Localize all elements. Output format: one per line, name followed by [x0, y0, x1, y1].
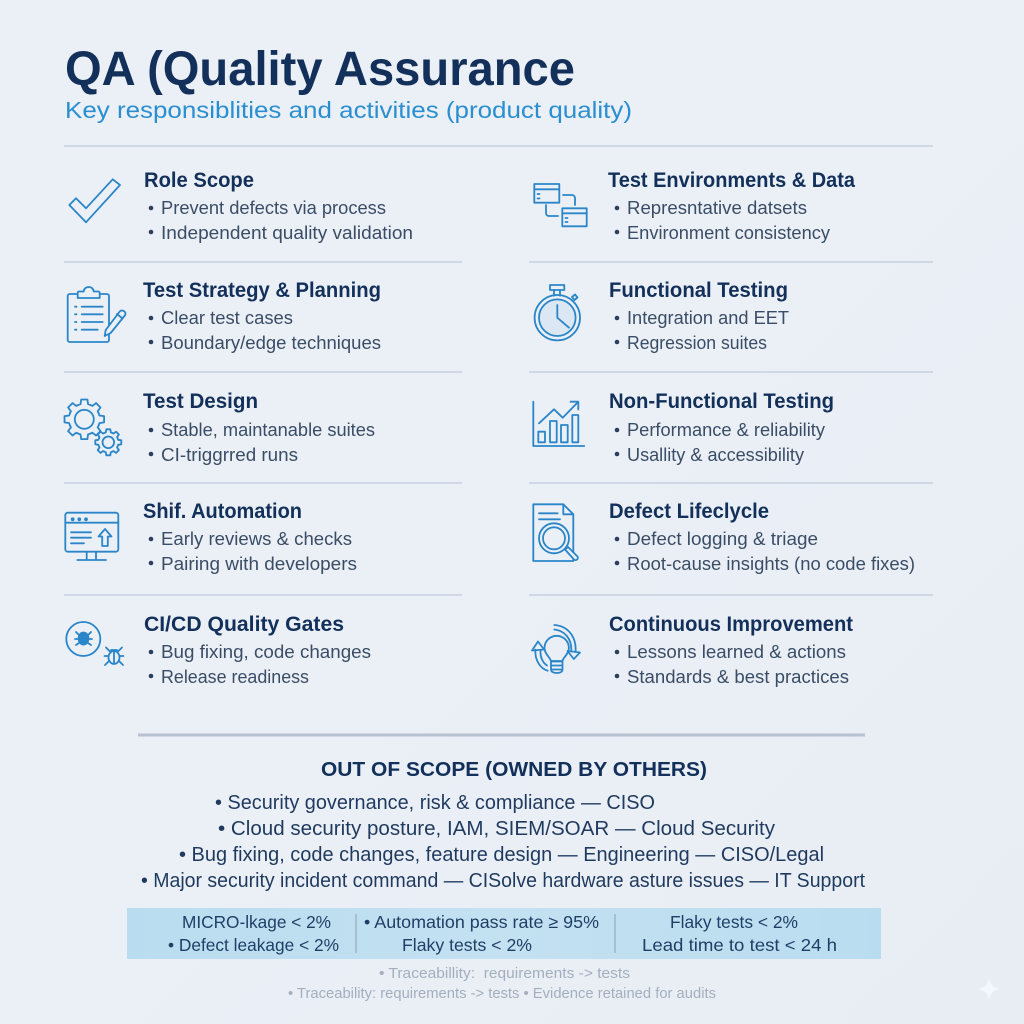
panel: defect lifecycle	[533, 500, 915, 574]
panel: test design	[64, 390, 375, 465]
metrics column 2	[364, 912, 599, 955]
bullets: defect lifecycle: Root-cause insights (no code fixes)	[627, 554, 915, 574]
footnotes: • Traceability: requirements -> tests • Evidence retained for audits	[288, 986, 716, 1002]
icon: linked windows	[534, 184, 587, 226]
heading: out of scope: OUT OF SCOPE (OWNED BY OTHERS)	[321, 759, 707, 781]
metrics column 3: Flaky tests < 2%	[670, 912, 798, 932]
icon: monitor with upload arrow	[65, 513, 118, 560]
out of scope list: • Major security incident command — CISolve hardware asture issues — IT Support	[141, 870, 865, 892]
bullets: functional testing: Integration and EET	[627, 308, 789, 328]
panel: shift automation	[65, 500, 357, 574]
heading: test strategy: Test Strategy & Planning	[143, 279, 381, 302]
bullets: test design	[149, 420, 375, 465]
panel: functional testing	[535, 279, 789, 353]
bullets: functional testing: Regression suites	[627, 333, 767, 353]
bullets: test strategy: Clear test cases	[161, 308, 293, 328]
bullets: continuous improvement: Lessons learned & actions	[627, 642, 846, 662]
panel: non-functional testing	[533, 390, 834, 465]
heading: CI/CD quality gates: CI/CD Quality Gates	[144, 613, 344, 636]
bullets: test design: Stable, maintanable suites	[161, 420, 375, 440]
metrics column 2: Flaky tests < 2%	[402, 935, 532, 955]
icon: light bulb with cycle arrows	[532, 625, 580, 673]
metrics column 3: Lead time to test < 24 h	[642, 935, 837, 955]
out of scope list: • Bug fixing, code changes, feature design — Engineering — CISO/Legal	[179, 844, 824, 866]
heading: continuous improvement: Continuous Improvement	[609, 613, 853, 636]
bullets: CI/CD: Bug fixing, code changes	[161, 642, 371, 662]
heading: defect lifecycle: Defect Lifeclycle	[609, 500, 769, 523]
bullets: test design: CI-triggrred runs	[161, 445, 298, 465]
icon: check mark	[69, 179, 120, 222]
heading: test design: Test Design	[143, 390, 258, 413]
metrics column 2: • Automation pass rate ≥ 95%	[364, 912, 599, 932]
title: QA (Quality Assurance	[65, 43, 575, 96]
subtitle: Key responsiblities and activities (product quality)	[65, 97, 632, 123]
icon: stopwatch	[535, 285, 580, 340]
icon: bugs	[66, 622, 124, 665]
bullets: continuous improvement: Standards & best practices	[627, 667, 849, 687]
bullets: test strategy	[149, 308, 381, 353]
panel: test environments and data	[534, 169, 855, 243]
out of scope list: • Security governance, risk & compliance — CISO	[215, 792, 655, 814]
heading: test environments: Test Environments & Data	[608, 169, 855, 192]
bullets: non-functional testing	[615, 420, 825, 465]
footnotes: • Traceabillity: requirements -> tests	[379, 966, 630, 982]
heading: functional testing: Functional Testing	[609, 279, 788, 302]
metrics column 1: MICRO-lkage < 2%	[182, 912, 331, 932]
bullets: non-functional testing: Performance & reliability	[627, 420, 825, 440]
metrics column 1	[168, 912, 339, 955]
bullets: role scope: Independent quality validation	[161, 223, 413, 243]
bullets: non-functional testing: Usallity & accessibility	[627, 445, 804, 465]
metrics column 1: • Defect leakage < 2%	[168, 935, 339, 955]
heading: shift automation: Shif. Automation	[143, 500, 302, 523]
out of scope list	[141, 792, 865, 892]
panel: out of scope	[141, 759, 865, 892]
bullets: role scope: Prevent defects via process	[161, 198, 386, 218]
panel: continuous improvement	[532, 613, 853, 687]
icon: growth chart	[533, 402, 584, 446]
bullets: shift automation: Early reviews & checks	[161, 529, 352, 549]
bullets: test environments	[615, 198, 830, 243]
panel: CI/CD quality gates	[66, 613, 371, 687]
bullets: shift automation	[149, 529, 357, 574]
out of scope list: • Cloud security posture, IAM, SIEM/SOAR — Cloud Security	[218, 818, 775, 840]
bullets: CI/CD	[149, 642, 371, 687]
panel: role scope	[69, 169, 413, 243]
bullets: test environments: Environment consistency	[627, 223, 830, 243]
panel: metrics band	[127, 908, 881, 959]
bullets: shift automation: Pairing with developers	[161, 554, 357, 574]
footnotes	[288, 966, 716, 1002]
bullets: test environments: Represntative datsets	[627, 198, 807, 218]
icon: document with magnifier	[533, 504, 578, 561]
bullets: continuous improvement	[615, 642, 849, 687]
icon: clipboard and pencil	[68, 287, 125, 342]
bullets: CI/CD: Release readiness	[161, 667, 309, 687]
bullets: functional testing	[615, 308, 789, 353]
panel: test strategy and planning	[68, 279, 381, 353]
heading: non-functional testing: Non-Functional Testing	[609, 390, 834, 413]
bullets: defect lifecycle: Defect logging & triage	[627, 529, 818, 549]
icon: sparkle watermark	[978, 978, 1000, 1000]
bullets: test strategy: Boundary/edge techniques	[161, 333, 381, 353]
bullets: role scope	[149, 198, 413, 243]
bullets: defect lifecycle	[615, 529, 915, 574]
icon: gears	[64, 400, 121, 455]
metrics column 3	[642, 912, 837, 955]
heading: role scope: Role Scope	[144, 169, 254, 192]
